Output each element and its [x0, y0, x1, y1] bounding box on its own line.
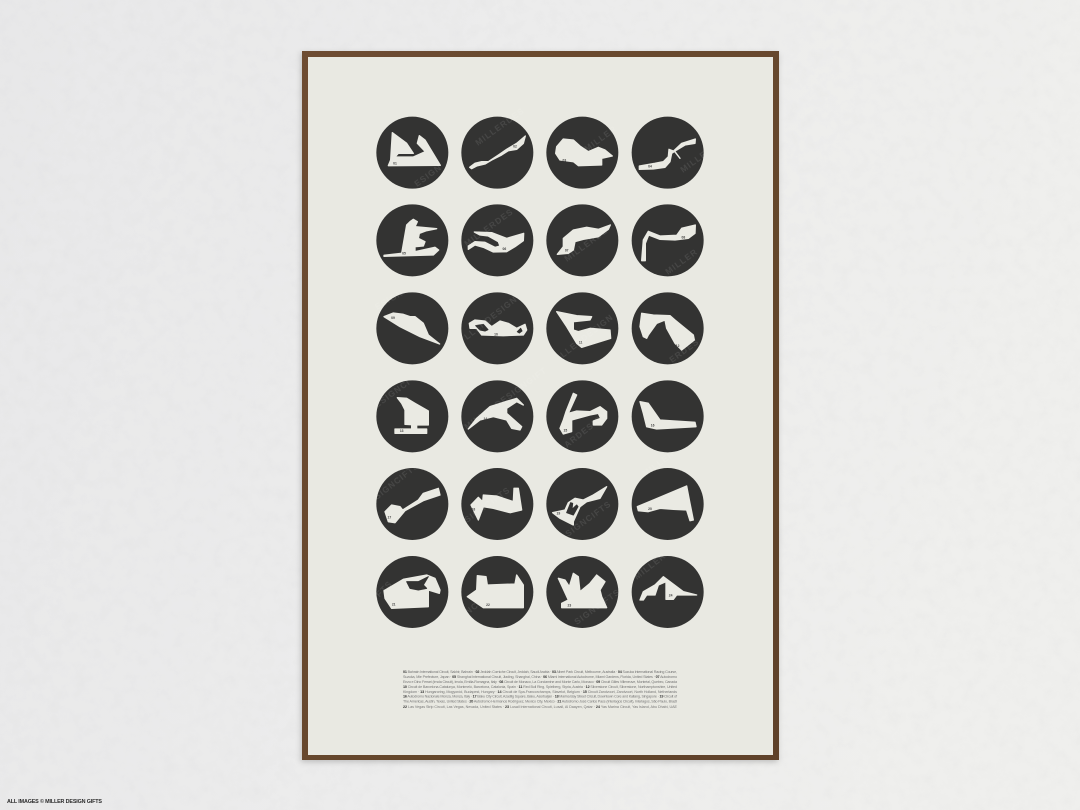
- circuit 13 Hungaroring: [376, 380, 448, 452]
- circuit 21 Interlagos: 21: [392, 602, 396, 606]
- watermarks: ESIGN: [412, 162, 444, 189]
- circuit 11 Red Bull Ring: [546, 292, 618, 364]
- circuit 20 Mexico City: [632, 468, 704, 540]
- circuit 02 Jeddah: [461, 117, 533, 189]
- watermarks: MILLERDESIGNGIFT: [462, 365, 549, 432]
- circuit 24 Yas Marina: 24: [669, 594, 673, 598]
- watermarks: MILLERDES: [473, 105, 526, 148]
- watermarks: MILLER: [640, 448, 677, 479]
- watermarks: MILLER: [582, 123, 619, 154]
- circuit 07 Imola: 07: [565, 249, 569, 253]
- circuit 15 Zandvoort: [546, 380, 618, 452]
- circuit 17 Baku: [376, 468, 448, 540]
- caption: circuit list: 22 Las Vegas Strip Circuit, Las Vegas, Nevada, United States · 23 Lusail International Circuit, Lusail, Al Daayen, Qatar · 24 Yas Marina Circuit, Yas Island, Abu Dhabi, UAE: [403, 705, 678, 709]
- circuit 08 Monaco: [632, 204, 704, 276]
- panel: circuit grid rows 5-6: [376, 468, 704, 628]
- circuit 23 Lusail: [546, 556, 618, 628]
- watermarks: LLERDESIGN: [462, 294, 519, 342]
- circuit 12 Silverstone: [632, 292, 704, 364]
- circuit 10 Barcelona: [461, 292, 533, 364]
- watermarks: SIGNCIFTS: [372, 460, 421, 502]
- circuit 03 Albert Park: [546, 117, 618, 189]
- circuit 02 Jeddah: 02: [513, 145, 517, 149]
- circuit 03 Albert Park: 03: [562, 159, 566, 163]
- circuit 23 Lusail: 23: [567, 603, 571, 607]
- image credit: ALL IMAGES © MILLER DESIGN GIFTS: [7, 798, 102, 805]
- circuit 10 Barcelona: 10: [494, 332, 498, 336]
- circuit 22 Las Vegas: 22: [486, 603, 490, 607]
- circuit 21 Interlagos: [376, 556, 448, 628]
- circuit 14 Spa: [461, 380, 533, 452]
- caption: circuit list: The Americas, Austin, Texas, United States · 20 Autódromo Hermanos Rodríguez, Mexico City, Mexico · 21 Autódromo José Carlos Pace (Interlagos Circuit), Interlagos, São Paulo, Brazil: [403, 700, 677, 704]
- watermarks: LLERDESIGN: [558, 312, 615, 360]
- circuit 06 Miami: [461, 204, 533, 276]
- caption: circuit list: [403, 670, 678, 709]
- circuit 18 Marina Bay: 18: [471, 508, 475, 512]
- watermarks: MILLER: [632, 551, 668, 582]
- circuit 04 Suzuka: 04: [648, 165, 652, 169]
- watermarks: [371, 105, 709, 627]
- circuit 18 Marina Bay: [461, 468, 533, 540]
- circuit 19 Americas: [546, 468, 618, 540]
- watermarks: SIGNCIFTS: [462, 485, 512, 525]
- watermarks: MILLERDES: [462, 206, 515, 249]
- circuit 13 Hungaroring: 13: [400, 429, 404, 433]
- panel: circuit grid rows 1-2: [376, 117, 704, 276]
- circuit 01 Bahrain: 01: [393, 161, 397, 165]
- watermarks: MILLE: [678, 149, 709, 175]
- poster paper: [308, 57, 773, 755]
- circuit 16 Monza: 16: [651, 424, 655, 428]
- circuit 05 Shanghai: 05: [402, 251, 406, 255]
- circuit 01 Bahrain: [376, 117, 448, 189]
- watermarks: ARDESIGN: [562, 409, 610, 450]
- caption: circuit list: 10 Circuit de Barcelona-Catalunya, Montmeló, Barcelona, Catalonia, Spain · 11 Red Bull Ring, Spielberg, Styria, Austria · 12 Silverstone Circuit, Silverstone, Northamptonshire, United: [403, 685, 677, 689]
- panel: circuit grid rows 3-4: [376, 292, 704, 452]
- circuit 09 Montreal: 09: [391, 316, 395, 320]
- circuit 19 Americas: 19: [556, 511, 560, 515]
- circuit 17 Baku: 17: [387, 515, 391, 519]
- circuit 12 Silverstone: 12: [676, 344, 680, 348]
- circuit 20 Mexico City: 20: [648, 507, 652, 511]
- circuit 04 Suzuka: [632, 117, 704, 189]
- circuit 05 Shanghai: [376, 204, 448, 276]
- circuit 09 Montreal: [376, 292, 448, 364]
- caption: circuit list: 16 Autodromo Nazionale Monza, Monza, Italy · 17 Baku City Circuit, Azadlig Square, Baku, Azerbaijan · 18 Marina Bay Street Circuit, Downtown Core and Kallang, Singapore · 19 Circuit of: [403, 695, 678, 699]
- caption: circuit list: Enzo e Dino Ferrari (Imola Circuit), Imola, Emilia-Romagna, Italy · 08 Circuit de Monaco, La Condamine and Monte Carlo, Monaco · 09 Circuit Gilles Villeneuve, Montréal, Quebec, Canada: [403, 680, 678, 684]
- watermarks: ESIGN: [373, 287, 405, 312]
- caption: circuit list: 01 Bahrain International Circuit, Sakhir, Bahrain · 02 Jeddah Corniche Circuit, Jeddah, Saudi Arabia · 03 Albert Park Circuit, Melbourne, Australia · 04 Suzuka International Racing Course,: [403, 670, 677, 674]
- watermarks: SIGNCIFTS: [563, 499, 613, 539]
- circuit 15 Zandvoort: 15: [563, 429, 567, 433]
- circuit 22 Las Vegas: [461, 556, 533, 628]
- caption: circuit list: Suzuka, Mie Prefecture, Japan · 05 Shanghai International Circuit, Jiading, Shanghai, China · 06 Miami International Autodrome, Miami Gardens, Florida, United States · 07 Autodromo: [403, 675, 677, 679]
- circuit 16 Monza: [632, 380, 704, 452]
- watermarks: SIGNCIFTS: [572, 587, 622, 627]
- watermarks: NC: [463, 600, 480, 617]
- circuit 14 Spa: 14: [483, 417, 487, 421]
- caption: circuit list: Kingdom · 13 Hungaroring, Mogyoród, Budapest, Hungary · 14 Circuit de Spa-Francorchamps, Stavelot, Belgium · 15 Circuit Zandvoort, Zandvoort, North Holland, Netherlands: [403, 690, 677, 694]
- watermarks: MILLERDE: [562, 225, 610, 264]
- watermarks: MILLER: [663, 246, 700, 277]
- circuit 24 Yas Marina: [632, 556, 704, 628]
- watermarks: IFTS: [371, 578, 394, 601]
- circuit 11 Red Bull Ring: 11: [579, 341, 583, 345]
- circuit 06 Miami: 06: [502, 247, 506, 251]
- wooden frame: [302, 51, 779, 760]
- circuit 08 Monaco: 08: [681, 236, 685, 240]
- watermarks: ESIGNCI: [372, 377, 412, 410]
- circuit 07 Imola: [546, 204, 618, 276]
- watermarks: ERDES: [667, 336, 701, 365]
